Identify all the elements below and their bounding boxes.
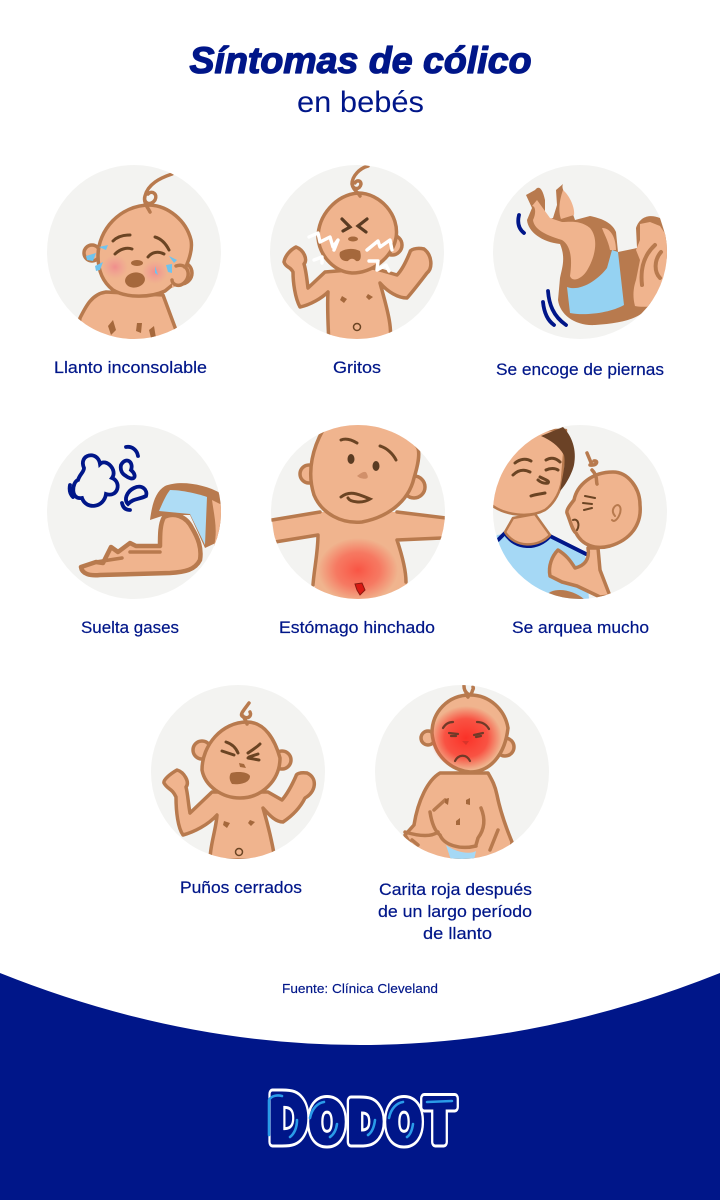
label: de llanto — [423, 924, 492, 943]
outline mass — [526, 184, 670, 325]
curl — [464, 686, 473, 697]
motion lines — [518, 215, 566, 325]
leg and arm — [81, 515, 201, 575]
chest marks — [223, 820, 255, 828]
logo: D — [347, 1091, 383, 1156]
neck — [505, 514, 550, 544]
right leg — [633, 222, 668, 307]
subtitle: en bebés — [297, 86, 424, 119]
face — [341, 439, 396, 502]
hair — [541, 427, 575, 491]
baby body — [549, 548, 610, 597]
shirt — [496, 534, 589, 599]
logo: O — [309, 1091, 345, 1156]
logo: D — [347, 1091, 383, 1156]
chest marks — [340, 294, 373, 303]
mother hand — [545, 590, 585, 610]
label — [378, 880, 532, 943]
panel: gritos — [270, 165, 444, 345]
arms and belly lines — [405, 800, 498, 850]
chest marks — [445, 798, 470, 825]
gas clouds — [73, 455, 118, 506]
head — [432, 695, 508, 772]
face — [113, 235, 169, 257]
logo: O — [386, 1091, 422, 1156]
panel: carita roja — [375, 685, 549, 860]
panel: se encoge de piernas — [493, 165, 670, 339]
panel: suelta gases — [47, 425, 222, 599]
panel: llanto inconsolable — [47, 165, 221, 350]
label: Gritos — [333, 358, 381, 377]
label: Suelta gases — [81, 618, 179, 637]
panel: puños cerrados — [151, 685, 325, 860]
scream lines — [309, 233, 392, 271]
face — [342, 219, 367, 232]
logo: O — [309, 1091, 345, 1156]
logo: T — [424, 1087, 455, 1157]
panel: estómago hinchado — [271, 421, 446, 610]
head — [318, 193, 397, 273]
title: Síntomas de cólico — [190, 40, 532, 81]
ears — [298, 463, 310, 485]
ear — [389, 235, 404, 257]
red face glow — [430, 706, 502, 770]
label: Carita roja después — [379, 880, 532, 899]
mother face — [513, 458, 560, 496]
head — [202, 722, 280, 798]
left thigh and foot — [532, 200, 595, 279]
chest marks — [108, 320, 156, 338]
logo: T — [424, 1087, 455, 1157]
face — [443, 722, 489, 761]
body and arms — [284, 247, 431, 345]
body and arms — [164, 770, 314, 860]
body — [405, 773, 512, 860]
source: Fuente: Clínica Cleveland — [282, 981, 438, 996]
panel: se arquea mucho — [490, 425, 667, 610]
torso and arms — [272, 512, 445, 599]
baby curl — [587, 453, 597, 484]
navel — [354, 324, 360, 330]
baby head — [567, 472, 640, 547]
label: Se encoge de piernas — [496, 360, 664, 379]
face — [222, 742, 260, 760]
label: Puños cerrados — [180, 878, 302, 897]
label: Llanto inconsolable — [54, 358, 207, 377]
diaper — [567, 250, 624, 314]
diaper — [446, 845, 476, 860]
curl — [145, 174, 172, 212]
collar — [498, 533, 586, 554]
curl — [241, 703, 251, 724]
navel — [236, 848, 242, 856]
ears — [421, 731, 435, 745]
logo: O — [386, 1091, 422, 1156]
body — [78, 290, 177, 339]
logo — [268, 1081, 455, 1158]
label: Se arquea mucho — [512, 618, 649, 637]
ears — [193, 741, 211, 759]
baby ear and face — [612, 505, 621, 521]
label: Estómago hinchado — [279, 618, 435, 637]
mother head — [490, 430, 566, 515]
ear — [84, 245, 100, 261]
curl — [352, 166, 368, 196]
tears — [86, 245, 177, 275]
logo: D — [268, 1081, 308, 1158]
head — [311, 421, 419, 522]
navel — [355, 583, 365, 595]
head — [98, 205, 191, 296]
label: de un largo período — [378, 902, 532, 921]
footer band — [0, 973, 720, 1200]
logo: D — [268, 1081, 308, 1158]
red belly glow — [320, 540, 396, 599]
diaper band — [150, 483, 222, 548]
